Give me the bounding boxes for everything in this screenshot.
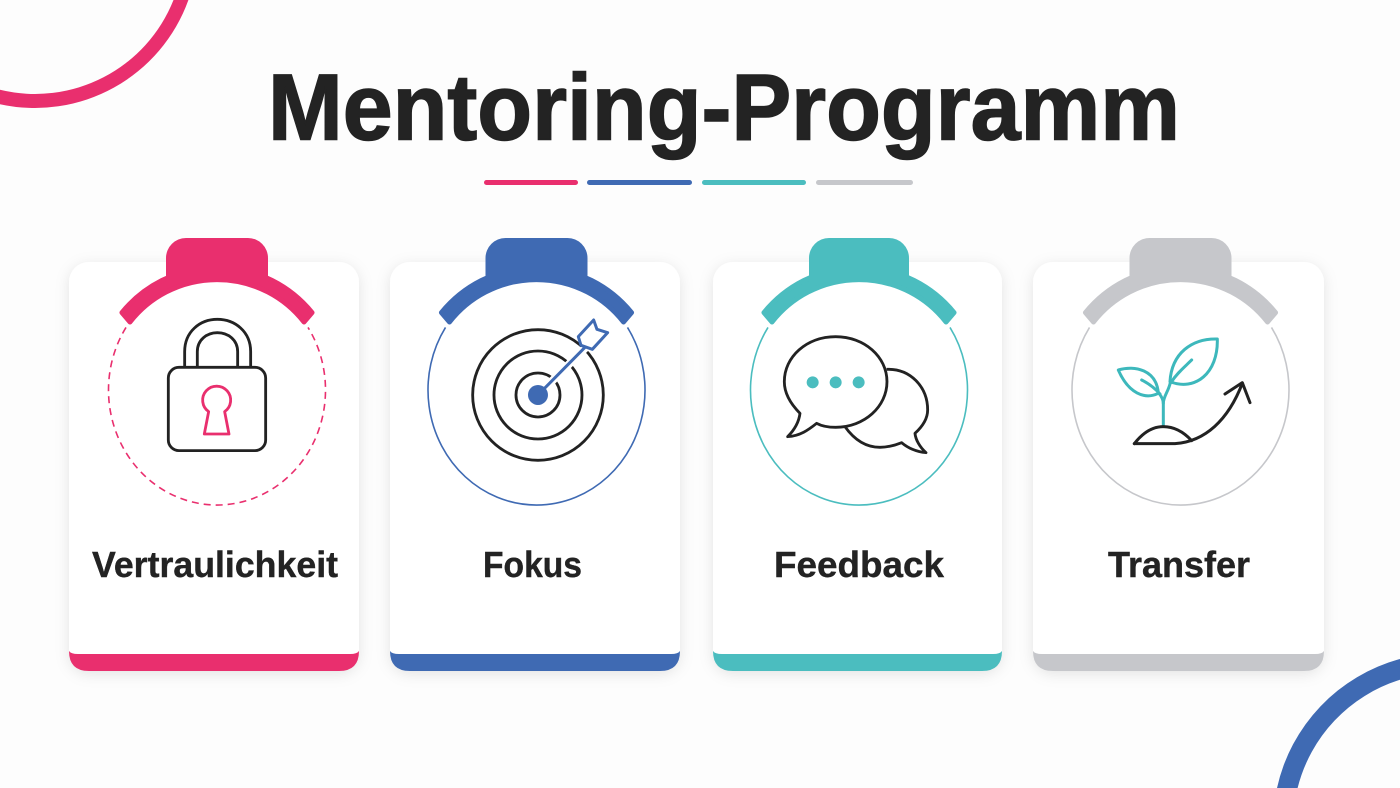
card bottom bar <box>390 651 680 671</box>
card background <box>1033 262 1324 671</box>
label: Feedback <box>774 544 945 585</box>
top clip shape <box>122 238 312 322</box>
circle outline <box>428 327 645 505</box>
card bottom bar <box>69 651 359 671</box>
card bottom bar <box>713 651 1002 671</box>
panel: Fokus <box>390 238 680 671</box>
icon: padlock <box>168 319 266 451</box>
icon: speech bubbles <box>784 337 928 453</box>
panel: Vertraulichkeit <box>69 238 359 671</box>
top clip shape <box>442 238 632 322</box>
card background <box>69 262 359 671</box>
decorative arc: top left <box>0 0 188 108</box>
icon: target with arrow <box>473 320 608 460</box>
card background <box>713 262 1002 671</box>
circle outline <box>1072 327 1289 505</box>
label: Transfer <box>1108 544 1250 585</box>
dashed circle <box>109 327 326 505</box>
panel: Transfer <box>1033 238 1324 671</box>
decorative arc: bottom right <box>1277 659 1400 788</box>
top clip shape <box>764 238 954 322</box>
card background <box>390 262 680 671</box>
icon: sprout with growth arrow <box>1118 339 1250 444</box>
title underline <box>484 180 913 185</box>
label: Fokus <box>483 544 582 585</box>
title: Mentoring-Programm <box>268 54 1180 160</box>
circle outline <box>750 327 968 505</box>
card bottom bar <box>1033 651 1324 671</box>
panel: Feedback <box>713 238 1002 671</box>
label: Vertraulichkeit <box>92 544 338 585</box>
top clip shape <box>1086 238 1276 322</box>
